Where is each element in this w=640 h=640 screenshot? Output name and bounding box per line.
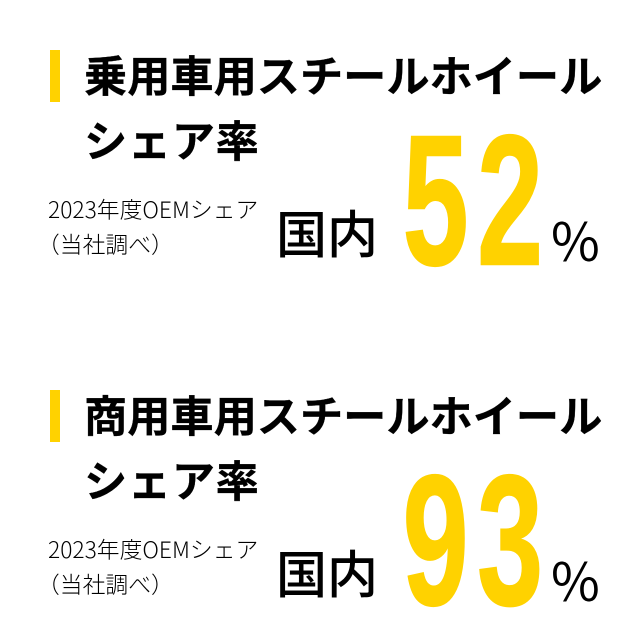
note text line 2: （当社調べ） — [37, 227, 174, 260]
note text line 1: 2023年度OEMシェア — [48, 532, 258, 565]
heading line 2: シェア率 — [84, 108, 260, 170]
note text line 2: （当社調べ） — [37, 567, 174, 600]
accent bar — [50, 50, 60, 102]
heading line 2: シェア率 — [84, 448, 260, 510]
percent sign: % — [551, 201, 600, 277]
number 52 — [402, 120, 543, 280]
percent sign: % — [551, 541, 600, 617]
number 93 — [402, 460, 543, 620]
panel: commercial vehicle wheel share — [37, 390, 602, 620]
panel: passenger car wheel share — [37, 50, 602, 280]
accent bar — [50, 390, 60, 442]
note text line 1: 2023年度OEMシェア — [48, 192, 258, 225]
